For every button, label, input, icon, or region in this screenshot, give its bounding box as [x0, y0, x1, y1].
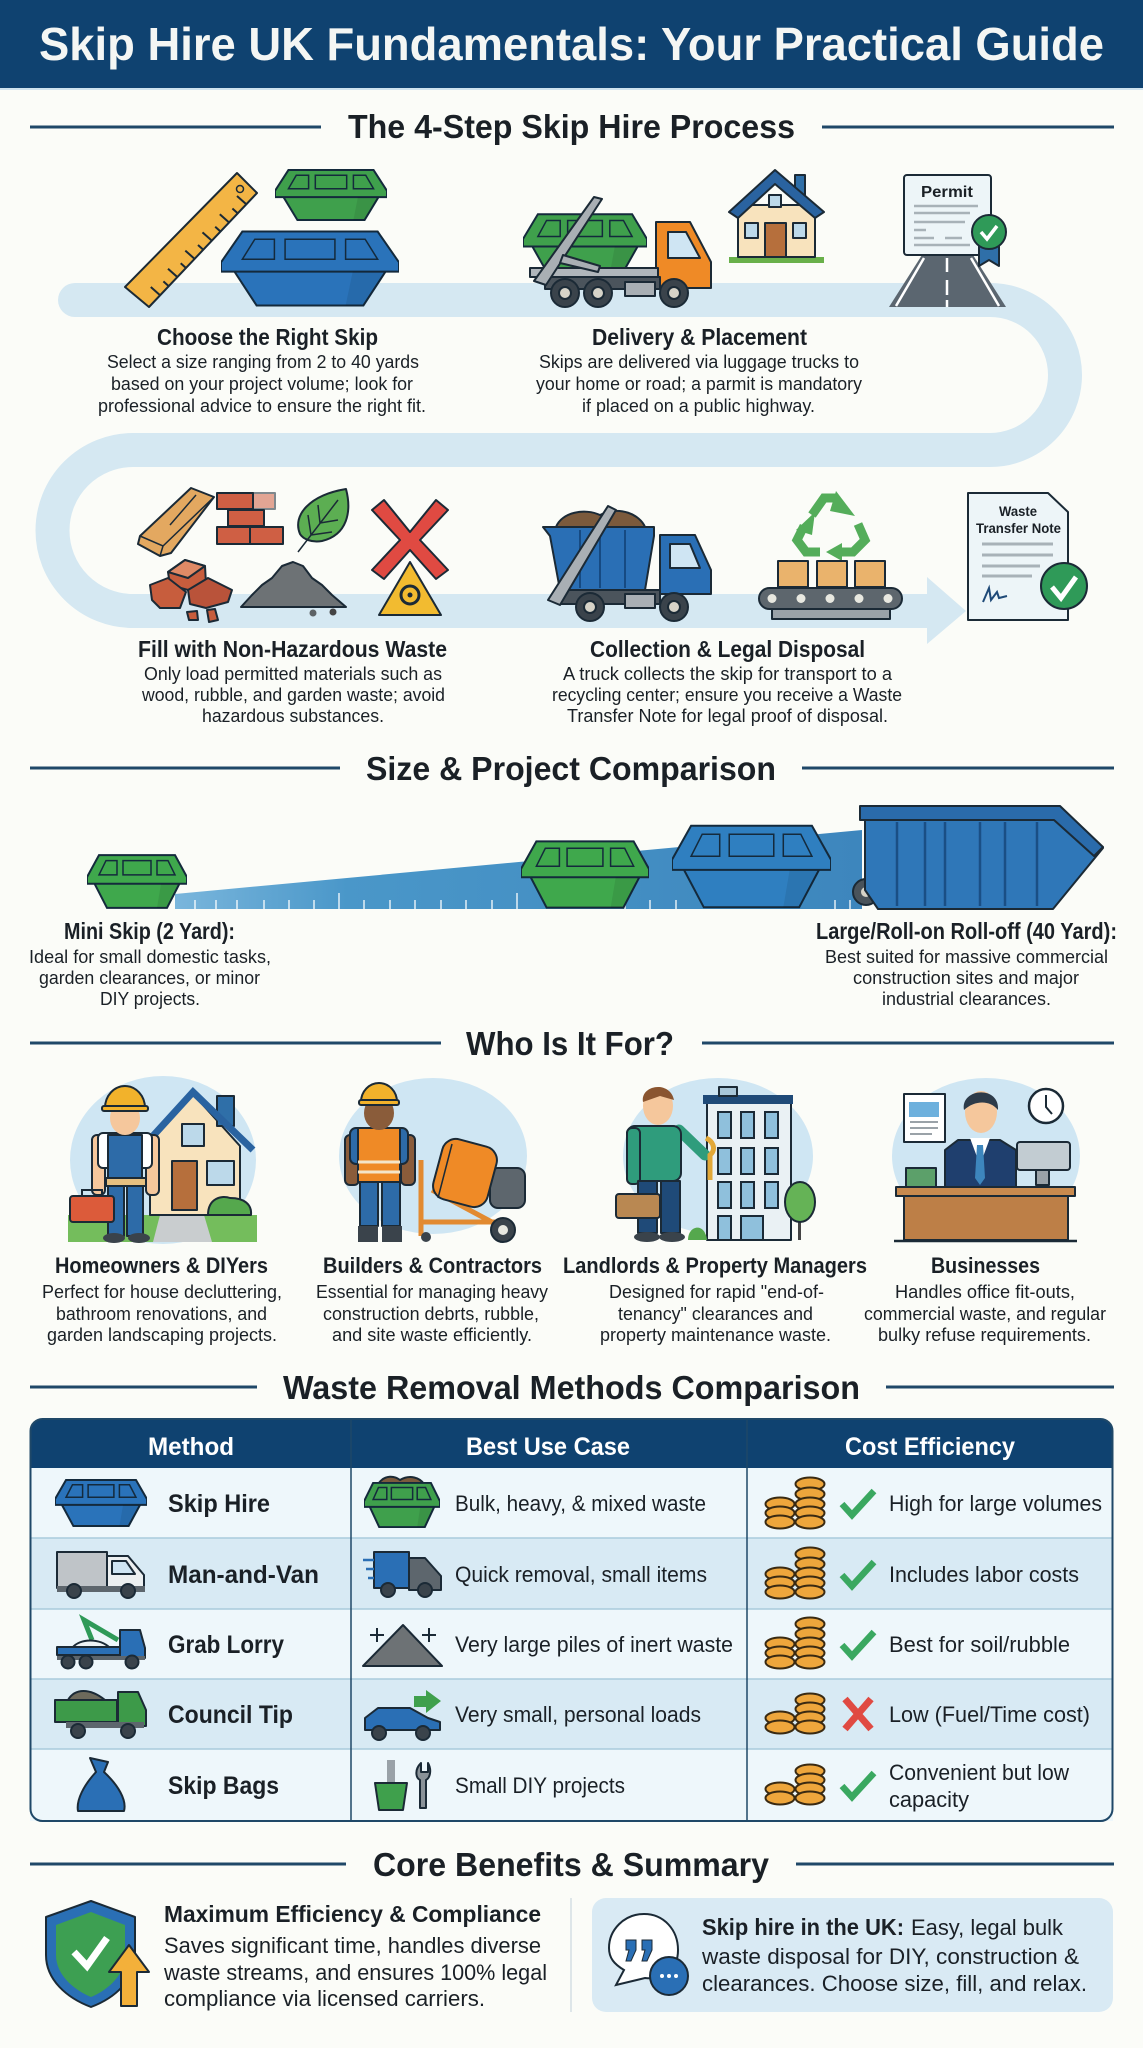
mini skip text: [29, 918, 271, 1009]
step 2 text: if placed on a public highway.: [582, 395, 815, 416]
tree: [785, 1182, 815, 1240]
process ribbon arrow: [53, 300, 1065, 644]
row: skip bags: Convenient but low: [889, 1760, 1069, 1785]
large skip text: construction sites and major: [853, 967, 1079, 988]
step 2 icon: skip truck: [523, 197, 711, 307]
row: skip hire: [55, 1477, 1102, 1528]
audience text: builders: Essential for managing heavy: [316, 1281, 549, 1302]
row: council tip: Low (Fuel/Time cost): [889, 1702, 1090, 1727]
icon: red cross: [372, 500, 448, 579]
mini skip text: DIY projects.: [100, 988, 200, 1009]
row: council tip: [55, 1690, 1090, 1740]
audience text: builders: construction debrts, rubble,: [323, 1303, 539, 1324]
benefit text: Maximum Efficiency & Compliance: [164, 1901, 541, 1927]
step 3 text: Fill with Non-Hazardous Waste: [138, 636, 447, 662]
row: grab lorry: Grab Lorry: [168, 1631, 284, 1659]
building: [703, 1087, 793, 1240]
audience text: builders: and site waste efficiently.: [332, 1324, 532, 1345]
icon: green skip: [275, 170, 387, 220]
icon: rubble bricks: [150, 560, 232, 622]
step 4 text: A truck collects the skip for transport to a: [563, 663, 893, 684]
icon: medium green skip: [521, 841, 649, 908]
benefit text: Saves significant time, handles diverse: [164, 1933, 541, 1958]
permit document: Permit: [921, 184, 974, 201]
step 4 icon: waste transfer note: [968, 493, 1087, 620]
step 2 icon: permit and road: [889, 175, 1006, 307]
step 1 text: Select a size ranging from 2 to 40 yards: [107, 351, 419, 372]
step 4 text: Collection & Legal Disposal: [590, 636, 865, 662]
audience icon: builder: [339, 1078, 527, 1242]
step 4 icon: collection truck: [543, 506, 711, 621]
heading: 4-step process: The 4-Step Skip Hire Process: [348, 108, 795, 145]
header banner: [0, 0, 1143, 90]
step 2 text: your home or road; a parmit is mandatory: [536, 373, 863, 394]
heading: waste removal methods: Waste Removal Methods Comparison: [283, 1369, 860, 1406]
large skip text: Best suited for massive commercial: [825, 946, 1108, 967]
step 3 text: [138, 636, 447, 726]
audience text: homeowners: bathroom renovations, and: [56, 1303, 267, 1324]
icon: brick wall: [217, 493, 283, 544]
audience text: businesses: [864, 1253, 1106, 1345]
step 1 text: Choose the Right Skip: [157, 324, 378, 350]
row: skip bags: capacity: [889, 1787, 969, 1812]
step 2 text: Skips are delivered via luggage trucks to: [539, 351, 859, 372]
mini skip text: garden clearances, or minor: [39, 967, 260, 988]
table header: Cost Efficiency: [845, 1433, 1015, 1461]
audience text: homeowners: [42, 1253, 282, 1345]
step 4 icon: waste transfer note: Transfer Note: [976, 521, 1061, 536]
benefit text: compliance via licensed carriers.: [164, 1986, 485, 2011]
audience text: builders: [316, 1253, 549, 1345]
audience text: landlords: property maintenance waste.: [600, 1324, 831, 1345]
icon: roll-on roll-off skip: [853, 806, 1103, 909]
icon: ruler: [125, 173, 257, 307]
row: grab lorry: Best for soil/rubble: [889, 1632, 1070, 1657]
icon: quote bubbles: [609, 1914, 688, 1995]
step 3 text: wood, rubble, and garden waste; avoid: [141, 684, 445, 705]
clock: [1029, 1089, 1063, 1123]
row: skip hire: Skip Hire: [168, 1490, 270, 1518]
heading: who is it for: Who Is It For?: [466, 1025, 674, 1062]
audience text: homeowners: Homeowners & DIYers: [55, 1253, 268, 1278]
parcels: [778, 561, 885, 587]
panel: summary: [592, 1898, 1113, 2012]
audience text: landlords: Landlords & Property Managers: [563, 1253, 867, 1278]
row: grab lorry: [57, 1618, 1070, 1668]
step 1 text: professional advice to ensure the right fit.: [98, 395, 426, 416]
audience text: businesses: Handles office fit-outs,: [895, 1281, 1075, 1302]
comparison table: [30, 1419, 1113, 1821]
summary text: Easy, legal bulk: [911, 1915, 1064, 1940]
step 4 text: Transfer Note for legal proof of disposal.: [567, 705, 888, 726]
table header: [30, 1419, 1113, 1468]
table rows background: [30, 1468, 1113, 1821]
row: man and van: [57, 1548, 1079, 1598]
table header: Method: [148, 1433, 234, 1461]
audience text: landlords: [563, 1253, 867, 1345]
audience text: businesses: bulky refuse requirements.: [878, 1324, 1091, 1345]
audience text: homeowners: Perfect for house decluttering,: [42, 1281, 282, 1302]
recycling symbol: [796, 491, 865, 561]
icon: mini green skip: [87, 855, 187, 908]
row: man and van: Quick removal, small items: [455, 1562, 707, 1587]
title: Skip Hire UK Fundamentals: Your Practical Guide: [39, 18, 1104, 70]
row: council tip: Very small, personal loads: [455, 1702, 701, 1727]
row: skip hire: Bulk, heavy, & mixed waste: [455, 1491, 706, 1516]
icon: wood plank: [138, 488, 214, 556]
heading: core benefits: Core Benefits & Summary: [373, 1846, 770, 1883]
step 1 text: [98, 324, 426, 416]
audience icon: homeowner: [68, 1076, 257, 1244]
icon: leaf: [298, 489, 348, 552]
icon: shield with check and arrow: [46, 1901, 149, 2007]
size scale wedge: [175, 830, 862, 909]
audience text: builders: Builders & Contractors: [323, 1253, 542, 1278]
permit badge: [972, 215, 1006, 266]
road: [889, 255, 1006, 307]
summary text: clearances. Choose size, fill, and relax.: [702, 1971, 1087, 1996]
table header: Best Use Case: [466, 1433, 630, 1461]
icon: blue skip: [221, 232, 399, 305]
step 4 text: [552, 636, 902, 726]
summary text: [701, 1914, 1087, 1996]
audience icon: landlord: [616, 1078, 815, 1242]
audience text: businesses: Businesses: [931, 1253, 1040, 1278]
benefit text: waste streams, and ensures 100% legal: [163, 1960, 547, 1985]
row: skip bags: Small DIY projects: [455, 1773, 625, 1798]
step 1 icons: ruler and skips: [125, 170, 387, 307]
row: grab lorry: Very large piles of inert waste: [455, 1632, 733, 1657]
icon: soil pile: [241, 562, 346, 616]
large skip text: industrial clearances.: [882, 988, 1051, 1009]
row: skip hire: High for large volumes: [889, 1491, 1102, 1516]
step 3 icons: permitted materials: [138, 488, 448, 622]
step 4 text: recycling center; ensure you receive a Waste: [552, 684, 902, 705]
step 4 icon: recycling conveyor: [759, 491, 902, 619]
row: man and van: Man-and-Van: [168, 1561, 319, 1589]
heading: size comparison: Size & Project Comparison: [366, 750, 776, 787]
row: skip bags: Skip Bags: [168, 1772, 279, 1800]
row: skip bags: [78, 1758, 1069, 1812]
row: council tip: Council Tip: [168, 1701, 293, 1729]
step 2 icon: house: [729, 170, 824, 263]
audience text: homeowners: garden landscaping projects.: [47, 1324, 277, 1345]
mini skip text: Mini Skip (2 Yard):: [64, 918, 235, 944]
cement mixer: [421, 1136, 525, 1242]
mini skip text: Ideal for small domestic tasks,: [29, 946, 271, 967]
step 3 text: Only load permitted materials such as: [144, 663, 442, 684]
summary text: waste disposal for DIY, construction &: [701, 1944, 1079, 1969]
benefit text: [163, 1901, 547, 2011]
step 4 icon: waste transfer note: Waste: [999, 504, 1037, 519]
large skip text: [816, 918, 1117, 1009]
row: man and van: Includes labor costs: [889, 1562, 1079, 1587]
step 1 text: based on your project volume; look for: [111, 373, 413, 394]
icon: biohazard sign: [379, 562, 441, 615]
audience text: landlords: Designed for rapid "end-of-: [609, 1281, 824, 1302]
audience text: businesses: commercial waste, and regular: [864, 1303, 1106, 1324]
step 3 text: hazardous substances.: [202, 705, 384, 726]
step 2 text: [536, 324, 863, 416]
conveyor: [759, 588, 902, 619]
wall document: [904, 1094, 945, 1142]
summary text: Skip hire in the UK:: [702, 1914, 904, 1940]
audience icon: business: [892, 1078, 1080, 1241]
icon: blue builder skip: [672, 826, 831, 907]
step 2 text: Delivery & Placement: [592, 324, 807, 350]
audience text: landlords: tenancy" clearances and: [618, 1303, 813, 1324]
